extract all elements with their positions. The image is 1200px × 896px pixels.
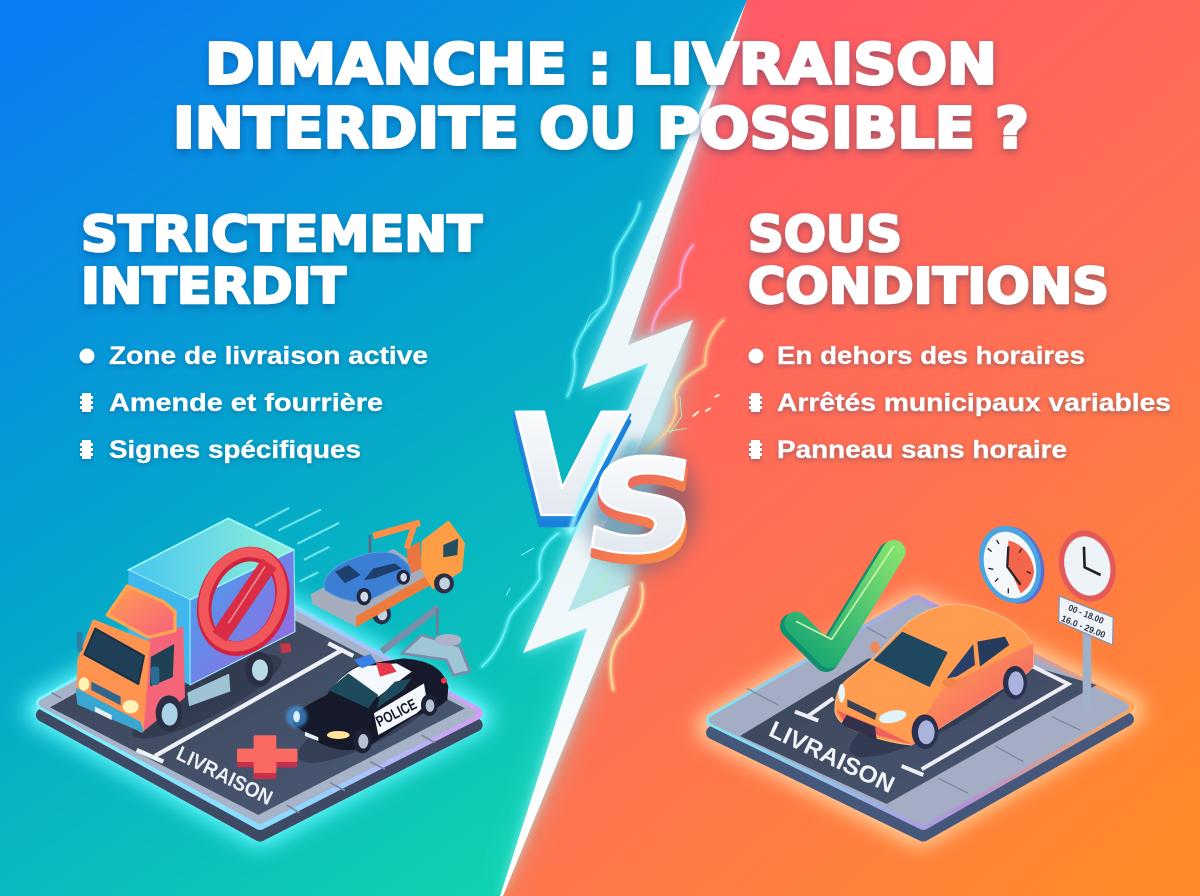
parking lines xyxy=(137,643,353,762)
left list: Amende et fourrière xyxy=(109,389,383,417)
tow truck with blue car xyxy=(312,523,463,626)
icon: no entry sign xyxy=(190,540,296,660)
right list: Panneau sans horaire xyxy=(777,436,1067,464)
police car xyxy=(286,654,451,777)
right heading xyxy=(748,206,1109,315)
title xyxy=(173,32,1029,162)
right list: En dehors des horaires xyxy=(777,342,1085,370)
crane wreck behind police car xyxy=(382,607,470,675)
VS badge: S xyxy=(576,441,709,591)
VS badge xyxy=(495,385,709,591)
left heading: STRICTEMENT xyxy=(81,206,483,263)
icon: red cross xyxy=(238,737,296,778)
right list: Arrêtés municipaux variables xyxy=(777,389,1171,417)
lightning bolt divider xyxy=(500,0,747,896)
parking sign with clock and hours xyxy=(1051,524,1123,710)
title: INTERDITE OU POSSIBLE ? xyxy=(173,96,1029,162)
police car: POLICE xyxy=(373,696,420,731)
icon: green check mark xyxy=(793,547,894,659)
platform: slab xyxy=(43,587,476,835)
title: DIMANCHE : LIVRAISON xyxy=(205,32,997,98)
platform: slab xyxy=(713,602,1127,835)
right illustration: car, check mark, clock and sign on delivery bay xyxy=(713,518,1127,835)
parking sign with clock and hours: 16.0 - 29.00 xyxy=(1060,613,1107,640)
road text: LIVRAISON xyxy=(173,742,276,810)
parking sign with clock and hours: 00 - 18.00 xyxy=(1067,603,1105,626)
left heading xyxy=(81,206,483,315)
left illustration: truck, tow truck, police car on delivery bay xyxy=(43,508,476,835)
left list xyxy=(80,342,428,464)
VS badge: V xyxy=(495,388,633,552)
right heading: CONDITIONS xyxy=(748,258,1109,315)
VS badge: S xyxy=(575,432,708,582)
left list: Signes spécifiques xyxy=(109,436,361,464)
road text: LIVRAISON xyxy=(765,716,899,799)
speed lines xyxy=(256,508,338,581)
background: right coral panel xyxy=(503,0,1200,896)
orange car xyxy=(835,604,1034,773)
VS badge: V xyxy=(495,395,633,559)
lightning sparks xyxy=(482,203,723,690)
parking lines xyxy=(795,667,1068,775)
platform: glow xyxy=(713,608,1127,830)
icon: wall clock xyxy=(969,518,1054,611)
left list: Zone de livraison active xyxy=(109,342,428,370)
delivery truck xyxy=(77,518,295,752)
VS badge: V xyxy=(496,385,634,549)
platform: glow xyxy=(43,593,475,830)
right heading: SOUS xyxy=(748,206,902,263)
right list xyxy=(748,342,1171,464)
left heading: INTERDIT xyxy=(81,258,347,315)
